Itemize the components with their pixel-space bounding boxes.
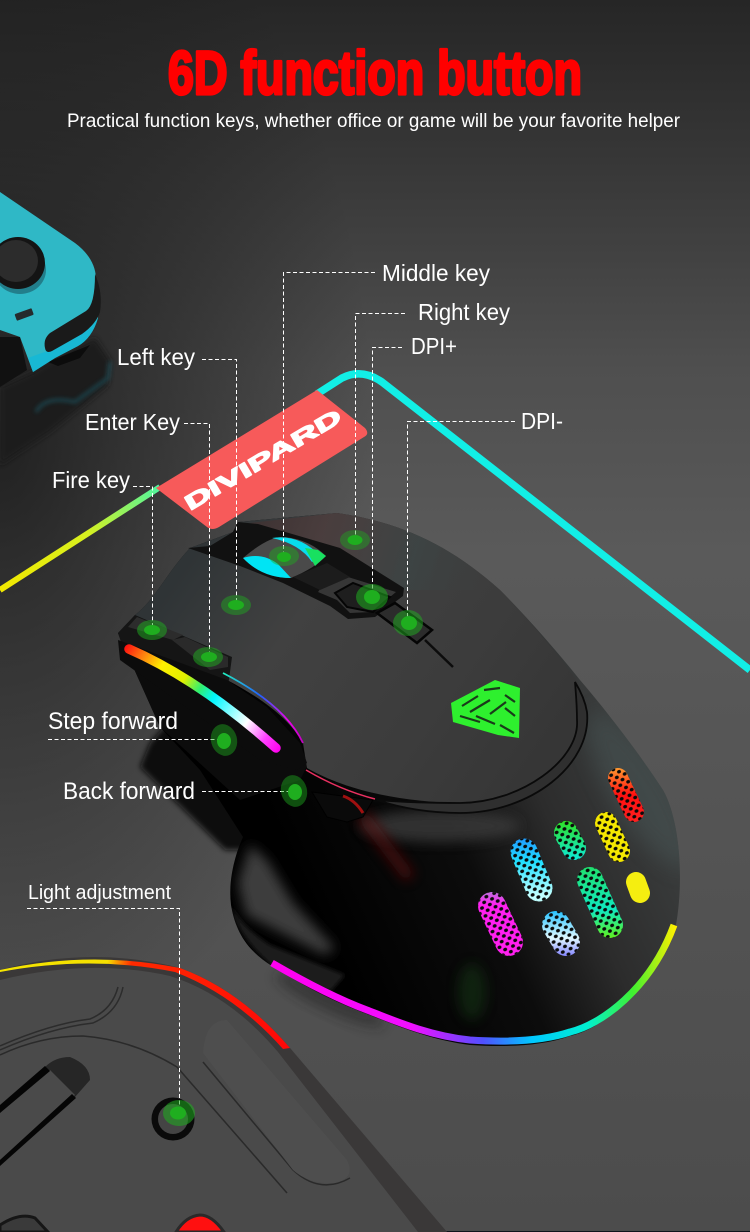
DPI plus button <box>335 583 390 612</box>
vent teal long <box>590 880 610 925</box>
marker back forward <box>277 772 311 810</box>
black panel <box>293 563 350 590</box>
red brand tag <box>156 390 367 529</box>
controller reflection <box>0 338 110 465</box>
red button <box>176 1215 224 1232</box>
subtitle: Practical function keys, whether office or game will be your favorite helper <box>67 110 680 132</box>
marker enter key <box>193 647 223 667</box>
pink seam <box>306 770 375 799</box>
label light adjustment: Light adjustment <box>28 882 171 904</box>
fire button <box>128 617 183 640</box>
side panel dark <box>118 633 310 800</box>
leader lines <box>27 272 515 1112</box>
marker middle key <box>269 546 299 566</box>
green reflection <box>458 964 486 1020</box>
lower body <box>118 513 680 1046</box>
sensor slot <box>0 1057 90 1163</box>
hotspot markers <box>137 530 423 1126</box>
label right key: Right key <box>418 299 510 325</box>
underside RGB strip <box>0 959 290 1049</box>
DPI minus button <box>377 603 432 643</box>
side button housing <box>118 615 232 687</box>
marker dpi minus <box>393 610 423 636</box>
button inner panel <box>318 572 396 613</box>
mousepad rim <box>0 374 750 670</box>
label fire key: Fire key <box>52 467 130 493</box>
thumb rest <box>238 845 335 955</box>
label back forward: Back forward <box>63 778 195 805</box>
labels <box>28 260 563 904</box>
label left key: Left key <box>117 344 195 370</box>
thumbstick <box>0 237 46 294</box>
scroll wheel <box>243 537 326 578</box>
marker left key <box>221 595 251 615</box>
vent blue long <box>524 852 539 888</box>
vent blue small <box>556 925 566 942</box>
brand name: DIVIPARD <box>181 405 346 515</box>
marker right key <box>340 530 370 550</box>
red reflection <box>362 815 410 878</box>
small foot <box>0 1216 48 1232</box>
button trim <box>188 522 404 619</box>
label dpi minus: DPI- <box>521 408 563 434</box>
foot outlines <box>0 987 123 1050</box>
side window <box>312 792 373 822</box>
marker light adjustment <box>163 1100 195 1126</box>
ring button <box>152 1098 194 1140</box>
thin RGB seam <box>223 673 303 743</box>
side RGB housing <box>118 640 307 770</box>
base RGB strip <box>272 925 674 1041</box>
under-mouse shadow <box>140 720 389 1036</box>
title: 6D function button <box>168 39 582 107</box>
controller shell <box>0 192 98 372</box>
bumper <box>45 274 101 352</box>
controller dark body <box>0 337 27 387</box>
label step forward: Step forward <box>48 708 178 735</box>
enter button <box>172 637 228 670</box>
seam line <box>425 640 453 667</box>
small button <box>15 308 34 321</box>
side RGB strip <box>129 649 276 748</box>
palm rest trim <box>377 682 587 813</box>
vent yellow long <box>606 823 619 851</box>
label dpi plus: DPI+ <box>411 333 457 359</box>
vent green small <box>566 833 574 848</box>
vent magenta <box>492 906 509 942</box>
mouse <box>118 513 711 1046</box>
vent yellow small <box>636 882 640 893</box>
marker dpi plus <box>356 584 388 610</box>
marker step forward <box>207 721 241 759</box>
top shell <box>118 513 581 803</box>
vent holes <box>492 778 640 942</box>
marker fire key <box>137 620 167 640</box>
mouse underside <box>0 957 447 1232</box>
label enter key: Enter Key <box>85 409 180 435</box>
label middle key: Middle key <box>382 260 490 286</box>
hump highlight <box>250 513 500 590</box>
game controller <box>0 192 110 465</box>
vent red <box>618 778 634 812</box>
logo shield <box>451 680 520 738</box>
